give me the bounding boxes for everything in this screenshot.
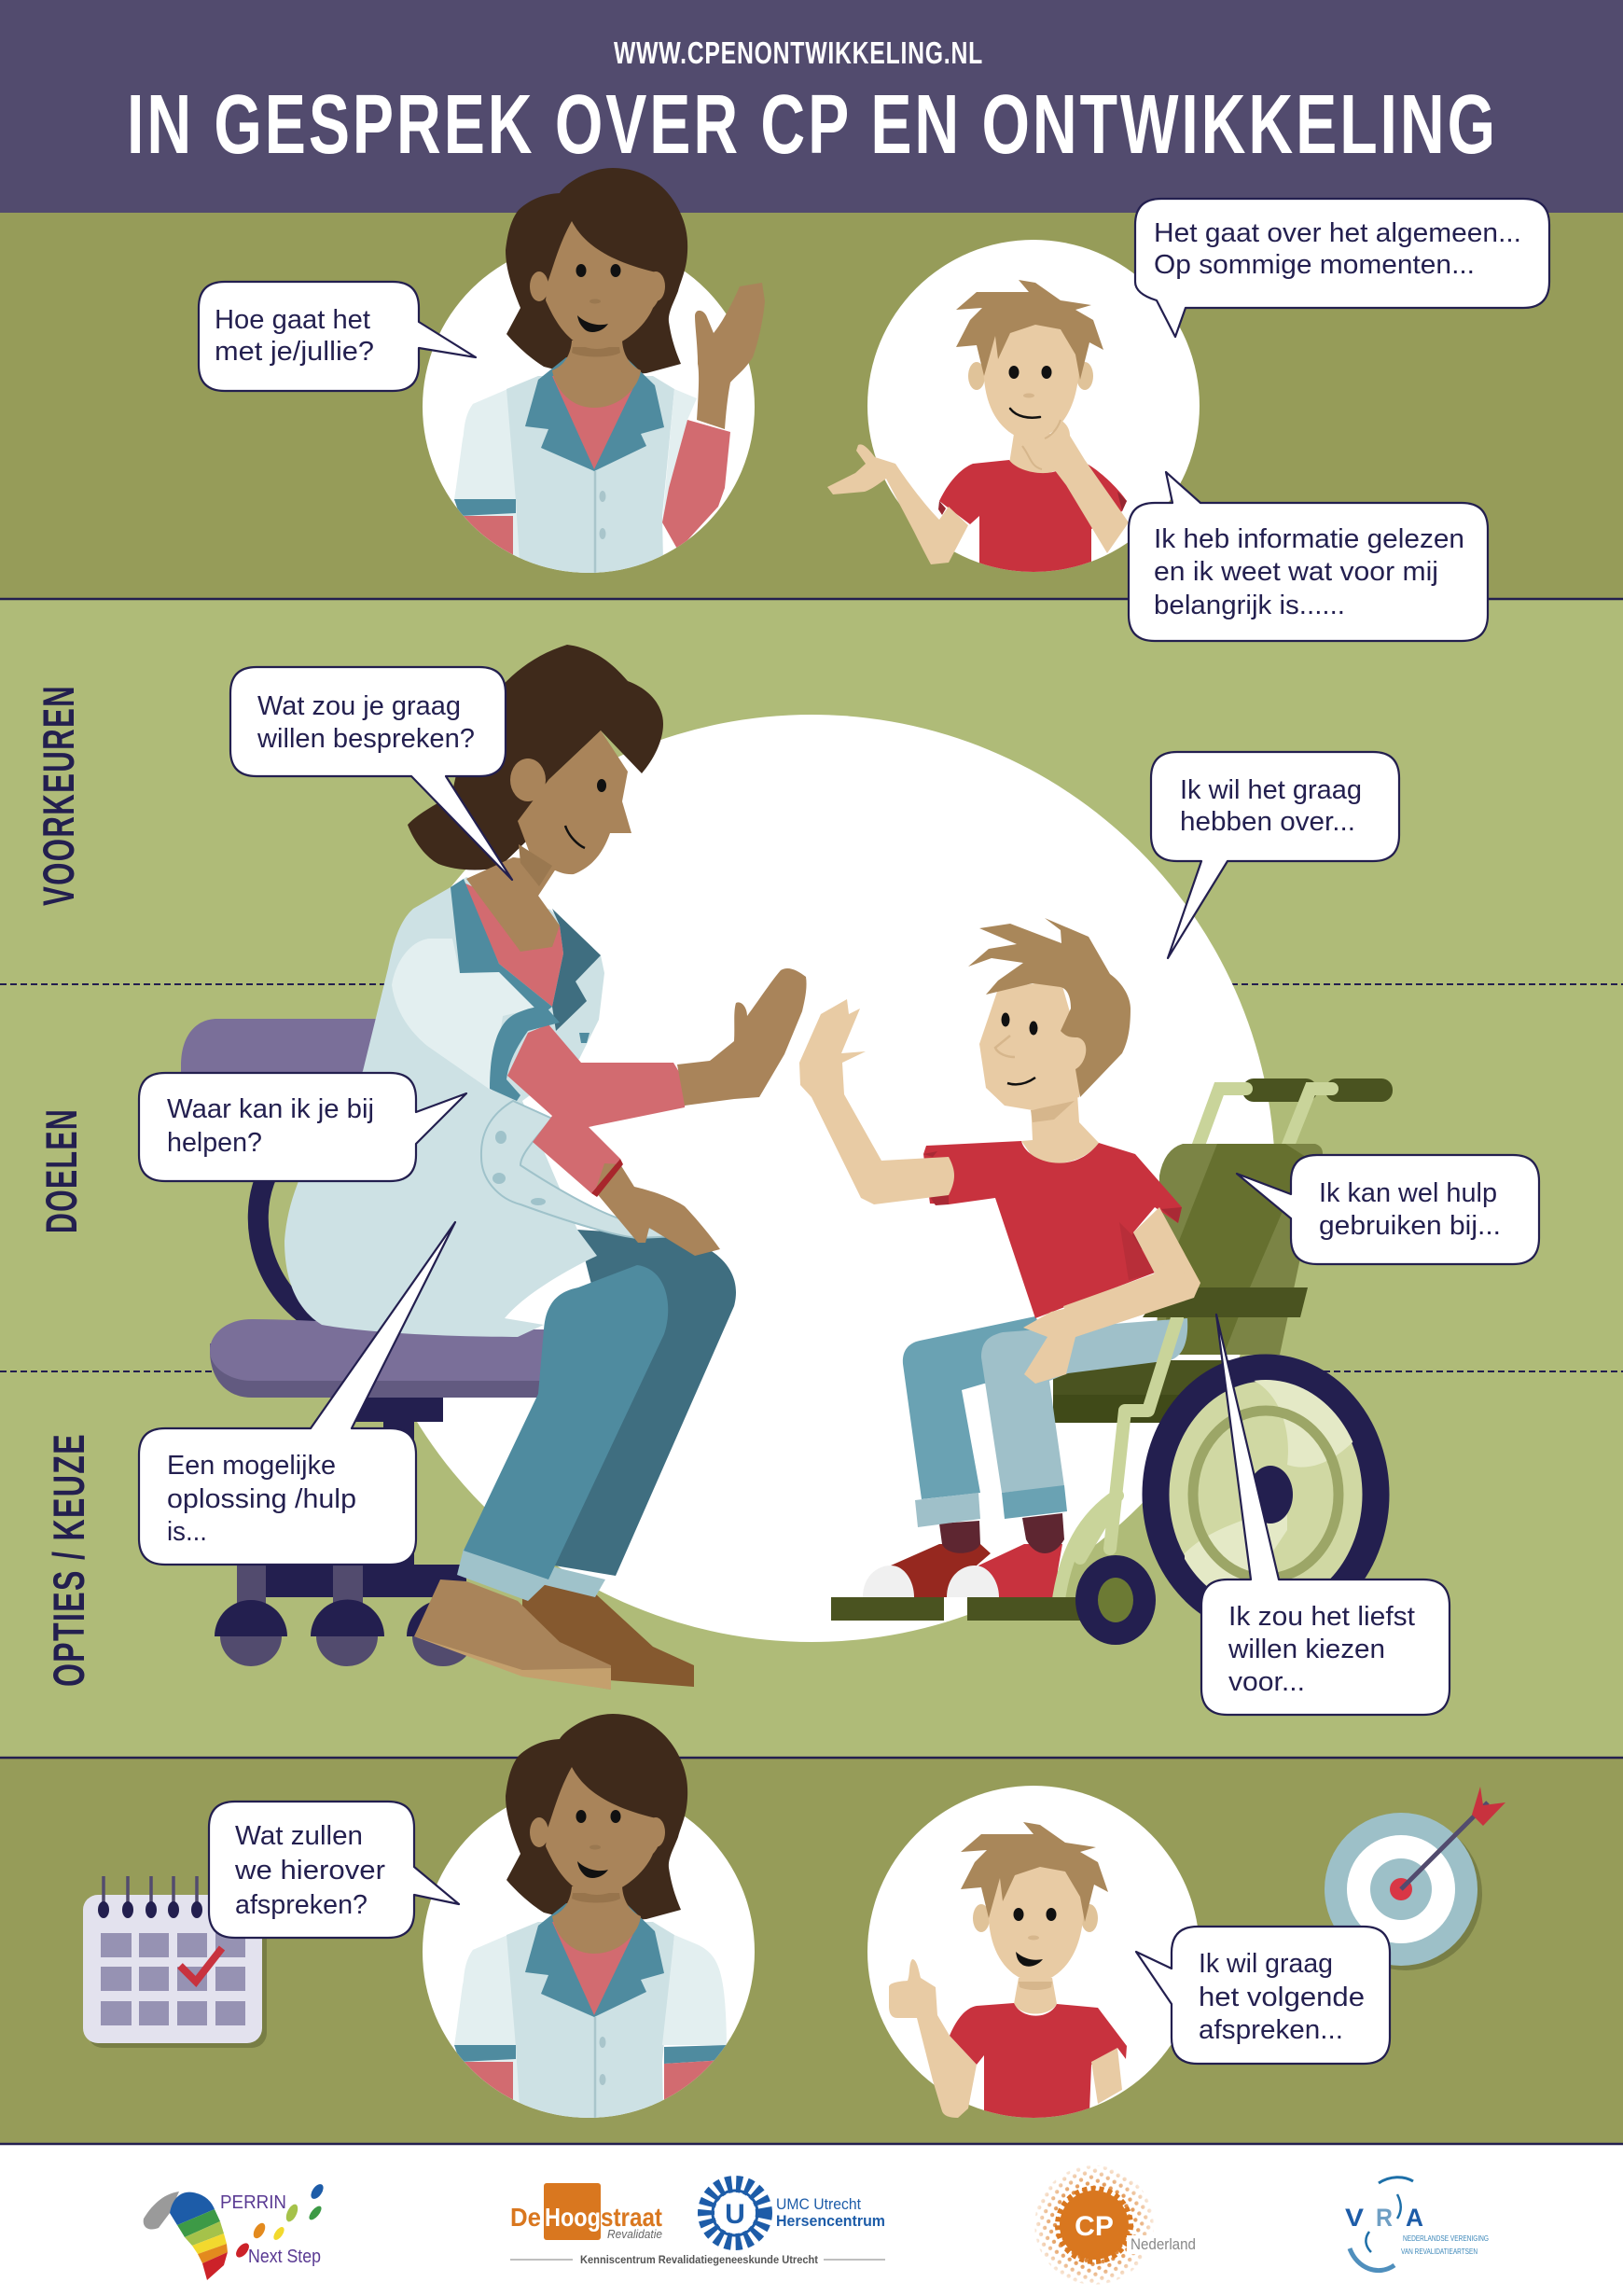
section label: opties keuze: OPTIES / KEUZE: [44, 1433, 93, 1687]
footplates: [831, 1597, 944, 1621]
logo: vra: VAN REVALIDATIEARTSEN: [1401, 2247, 1477, 2256]
rear shoe: [522, 1579, 694, 1687]
rear leg: [903, 1316, 1063, 1499]
illustration: office chair: [181, 1019, 550, 1666]
front leg: [981, 1318, 1187, 1493]
large wheel: [1156, 1368, 1376, 1621]
illustration: wheelchair front parts: [831, 1261, 1376, 1645]
front shoe: [978, 1544, 1062, 1597]
logo: umc utrecht: Hersencentrum: [776, 2212, 885, 2230]
logo: cp nederland: CP: [1075, 2211, 1114, 2242]
bubble: ik zou het liefst: willen kiezen: [1228, 1635, 1385, 1664]
hand on knee: [595, 1163, 720, 1256]
chair wheels: [215, 1599, 479, 1636]
hair: [968, 918, 1131, 1097]
header band: [0, 0, 1623, 213]
logo: de hoogstraat: Revalidatie: [607, 2227, 662, 2241]
bubble: een mogelijke oplossing: [139, 1222, 455, 1565]
bubble: een mogelijke oplossing: is...: [167, 1517, 207, 1547]
bubble: ik heb informatie: Ik heb informatie gelezen: [1154, 524, 1464, 554]
chair post: [264, 1394, 466, 1597]
chair arc: [258, 1177, 322, 1325]
logo: cp nederland: [1034, 2165, 1200, 2285]
neck: [466, 857, 560, 952]
bubble: ik wil graag: het volgende: [1199, 1983, 1365, 2012]
coat flap: [481, 1101, 677, 1238]
t-shirt: [923, 1141, 1182, 1318]
chair back: [181, 1019, 392, 1082]
logo caption: kenniscentrum: Kenniscentrum Revalidatiegeneeskunde Utrecht: [580, 2253, 818, 2266]
lower arm: [1023, 1207, 1200, 1384]
bubble: het gaat over: Op sommige momenten...: [1154, 250, 1475, 280]
front leg: [464, 1265, 668, 1579]
logo: vra: [1345, 2178, 1489, 2271]
illustration: boy thinking: [827, 240, 1200, 578]
bubble: het gaat over: [1135, 199, 1549, 337]
bubble: ik kan wel hulp: gebruiken bij...: [1319, 1211, 1501, 1241]
logo: vra: V: [1345, 2204, 1364, 2232]
logo: cp nederland: Nederland: [1131, 2235, 1196, 2253]
bubble: ik kan wel hulp: Ik kan wel hulp: [1319, 1178, 1497, 1208]
bubble: een mogelijke oplossing: oplossing /hulp: [167, 1484, 356, 1514]
logo: umc utrecht: U: [725, 2199, 745, 2230]
logo: vra: NEDERLANDSE VERENIGING: [1403, 2234, 1489, 2243]
logo: umc utrecht: [706, 2184, 885, 2242]
panel: opening conversation band: [0, 213, 1623, 599]
bubble: ik wil graag: Ik wil graag: [1199, 1949, 1333, 1979]
logo: de hoogstraat: De: [510, 2203, 541, 2232]
bubble: waar kan ik: Waar kan ik je bij: [167, 1094, 374, 1124]
head: [1065, 1034, 1089, 1065]
armrest: [1143, 1287, 1308, 1317]
logo: de hoogstraat: straat: [601, 2203, 662, 2232]
panel: closing conversation band: [0, 1758, 1623, 2144]
bubble: ik heb informatie: [1129, 472, 1488, 641]
bubble: ik heb informatie: en ik weet wat voor mij: [1154, 557, 1438, 587]
bubble: wat zullen we: Wat zullen: [235, 1821, 363, 1851]
backrest: [1157, 1144, 1323, 1355]
bubble: hoe gaat het: [199, 282, 476, 391]
bubble: wat zou je: Wat zou je graag: [257, 691, 461, 721]
bubble: een mogelijke oplossing: Een mogelijke: [167, 1451, 336, 1481]
bubble: ik wil graag: [1136, 1927, 1390, 2064]
ear: [510, 758, 546, 801]
section label: voorkeuren: VOORKEUREN: [34, 685, 83, 906]
shirt: [464, 883, 563, 1007]
cuffs: [915, 1493, 980, 1527]
logo: de hoogstraat: Hoog: [545, 2203, 601, 2232]
face: [518, 731, 631, 874]
raised hand: [677, 968, 807, 1106]
bubble: ik zou het liefst: Ik zou het liefst: [1228, 1602, 1415, 1632]
illustration: wheelchair: [1053, 1078, 1393, 1423]
bubble: wat zullen we: we hierover: [234, 1856, 385, 1886]
coat: [284, 877, 604, 1337]
bubble: hoe gaat het: met je/jullie?: [215, 337, 374, 367]
bubble: ik heb informatie: belangrijk is......: [1154, 591, 1345, 620]
front shoe: [414, 1579, 611, 1690]
logo: perrin next step: PERRIN: [220, 2192, 286, 2213]
bubble: hoe gaat het: Hoe gaat het: [215, 305, 370, 335]
logo: vra: R: [1376, 2204, 1393, 2232]
bubble: ik wil het graag: hebben over...: [1180, 807, 1355, 837]
bubble: ik wil het graag: Ik wil het graag: [1180, 775, 1362, 805]
bubble: het gaat over: Het gaat over het algemeen...: [1154, 218, 1521, 248]
bubble: ik zou het liefst: [1201, 1315, 1450, 1715]
section label: doelen: DOELEN: [36, 1108, 86, 1233]
rear shoe: [891, 1544, 991, 1597]
hair: [408, 645, 663, 870]
handles: [1242, 1078, 1317, 1102]
big white circle: [348, 715, 1275, 1642]
neck: [1021, 1093, 1099, 1163]
panel: voorkeuren doelen opties band: [0, 599, 1623, 1758]
sleeve cuff: [490, 1007, 560, 1101]
bubble: waar kan ik: [139, 1073, 466, 1181]
illustration: boy seated: [799, 918, 1200, 1597]
bubble: ik kan wel hulp: [1237, 1155, 1539, 1264]
bubble: ik wil graag: afspreken...: [1199, 2015, 1343, 2045]
illustration: boy thumbs up: [867, 1786, 1200, 2136]
illustration: caregiver closing: [423, 1714, 755, 2155]
bubble: wat zou je: [230, 667, 512, 880]
logo: perrin next step: Next Step: [248, 2247, 321, 2267]
logo: de hoogstraat: [510, 2183, 662, 2241]
illustration: caregiver seated: [284, 645, 807, 1690]
logo: vra: A: [1406, 2204, 1423, 2232]
logo: umc utrecht: UMC Utrecht: [776, 2195, 861, 2213]
website url: WWW.CPENONTWIKKELING.NL: [614, 35, 983, 70]
socks: [939, 1521, 980, 1553]
coat highlight: [392, 939, 542, 1091]
chair seat: [210, 1343, 550, 1398]
collar: [451, 879, 552, 1015]
bubble: wat zullen we: afspreken?: [235, 1890, 368, 1920]
caster wheel: [1075, 1555, 1156, 1645]
bubble: ik wil het graag: [1151, 752, 1399, 958]
illustration: caregiver waving: [423, 168, 765, 606]
lower arm over armrest: [1063, 1261, 1200, 1337]
arm sleeve pink: [507, 1024, 687, 1193]
bubble: ik zou het liefst: voor...: [1228, 1667, 1305, 1697]
seat: [1053, 1360, 1236, 1395]
pocket: [579, 1033, 590, 1043]
calendar icon: [83, 1876, 267, 2048]
socks: [457, 1549, 605, 1601]
bubble: wat zullen we: [209, 1802, 459, 1938]
bubble: waar kan ik: helpen?: [167, 1128, 262, 1158]
rear leg: [548, 1230, 736, 1576]
target icon: [1325, 1787, 1505, 1970]
raised arm: [799, 999, 954, 1204]
logo: perrin next step: [144, 2182, 326, 2280]
frame: [1057, 1318, 1177, 1614]
bubble: wat zou je: willen bespreken?: [257, 724, 475, 754]
